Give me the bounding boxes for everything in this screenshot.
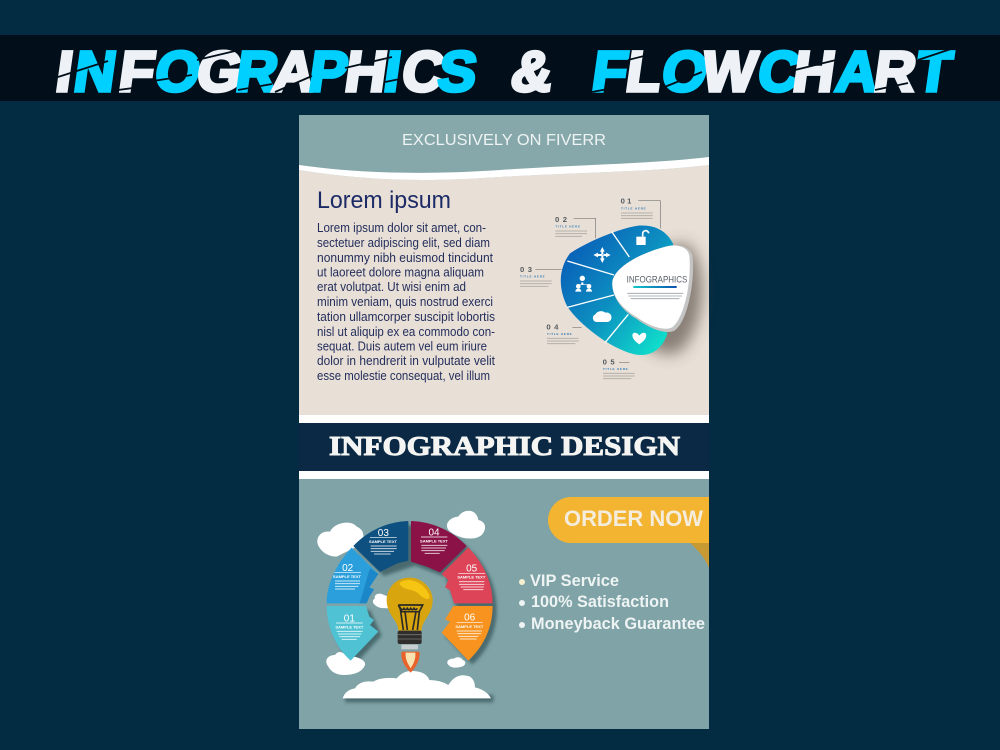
chart: infographics fan: TITLE HERE <box>547 332 572 336</box>
text block: tation ullamcorper suscipit lobortis <box>317 310 495 324</box>
title text: G <box>193 40 246 104</box>
icons <box>575 231 649 344</box>
chart: lightbulb ring: 06 <box>464 613 476 624</box>
chart: infographics fan: INFOGRAPHICS <box>627 274 687 284</box>
text block: erat volutpat. Ut wisi enim ad <box>317 280 466 294</box>
segment 05 <box>442 547 493 603</box>
list: benefits <box>519 572 705 633</box>
segment 01 <box>327 606 378 661</box>
chart: lightbulb ring: SAMPLE TEXT <box>333 574 362 579</box>
labels <box>520 197 632 366</box>
title text: A <box>269 40 319 104</box>
panel: beige content <box>299 165 709 415</box>
title text: F <box>115 40 159 104</box>
segment 04 <box>411 521 467 572</box>
chart: lightbulb ring: SAMPLE TEXT <box>335 624 364 629</box>
segment 03 <box>353 521 408 572</box>
chart: lightbulb ring: 01 <box>344 613 355 624</box>
icon: rocket flame <box>401 652 420 673</box>
blob <box>612 245 693 332</box>
labels: 02 <box>555 215 567 224</box>
chart: lightbulb ring: 03 <box>378 528 389 539</box>
wave <box>299 157 709 180</box>
list: benefits: VIP Service <box>530 572 619 590</box>
chart: lightbulb ring: 05 <box>466 564 478 575</box>
title text: A <box>832 40 882 104</box>
chart: infographics fan: TITLE HERE <box>621 207 646 211</box>
title text: O <box>151 40 204 104</box>
title text: T <box>912 40 956 104</box>
clouds <box>317 511 491 698</box>
band: infographic design: INFOGRAPHIC DESIGN <box>329 431 681 461</box>
text block: Lorem ipsum dolor sit amet, con- <box>317 221 486 235</box>
title text: L <box>622 40 666 104</box>
chart: lightbulb ring: SAMPLE TEXT <box>420 538 449 543</box>
title banner <box>0 35 1000 104</box>
chart: lightbulb ring: 04 <box>428 527 440 538</box>
chart: infographics fan: TITLE HERE <box>603 367 628 371</box>
title text: I <box>52 40 77 104</box>
shadows <box>331 525 497 702</box>
heading: exclusively: EXCLUSIVELY ON FIVERR <box>402 132 606 149</box>
labels: 03 <box>520 265 532 274</box>
text block: nisl ut aliquip ex ea commodo con- <box>317 325 495 339</box>
title text: R <box>232 40 282 104</box>
text block: sequat. Duis autem vel eum iriure <box>317 340 487 354</box>
chart: infographics fan: TITLE HERE <box>555 225 580 229</box>
text block: sectetuer adipiscing elit, sed diam <box>317 236 490 250</box>
heading: lorem ipsum: Lorem ipsum <box>317 187 451 214</box>
chart: lightbulb ring: 02 <box>342 563 354 574</box>
chart: lightbulb ring <box>317 511 497 702</box>
title text: W <box>698 40 761 104</box>
labels: 01 <box>621 197 632 206</box>
title text: I <box>380 40 405 104</box>
title text: O <box>658 40 711 104</box>
labels: 05 <box>603 357 615 366</box>
text block: ut laoreet dolore magna aliquam <box>317 266 484 280</box>
title text: & <box>507 40 557 104</box>
title text: N <box>70 40 120 104</box>
title text: H <box>341 40 391 104</box>
list: benefits: Moneyback Guarantee <box>531 615 705 633</box>
order now button: ORDER NOW <box>564 506 703 531</box>
poster <box>299 115 709 729</box>
chart: infographics fan: TITLE HERE <box>520 275 545 279</box>
title text: H <box>789 40 839 104</box>
text block: esse molestie consequat, vel illum <box>317 369 490 383</box>
title text <box>52 40 956 104</box>
chart: infographics fan <box>520 197 702 379</box>
title text: C <box>754 40 804 104</box>
title text: P <box>305 40 352 104</box>
segment 02 <box>327 548 378 603</box>
segment 06 <box>442 606 493 661</box>
icon: lightbulb <box>387 578 433 649</box>
text block: minim veniam, quis nostrud exerci <box>317 295 493 309</box>
text block: dolor in hendrerit in vulputate velit <box>317 354 495 368</box>
chart: lightbulb ring: SAMPLE TEXT <box>455 624 484 629</box>
labels: 04 <box>546 322 559 331</box>
title text: C <box>398 40 448 104</box>
band: infographic design <box>299 415 709 479</box>
title text: S <box>434 40 481 104</box>
text block: nonummy nibh euismod tincidunt <box>317 251 493 265</box>
title text: R <box>870 40 920 104</box>
panel: lower teal <box>299 479 709 729</box>
text block <box>317 221 495 383</box>
order now button <box>548 497 709 568</box>
list: benefits: 100% Satisfaction <box>531 593 669 611</box>
title text: F <box>588 40 632 104</box>
chart: lightbulb ring: SAMPLE TEXT <box>457 575 486 580</box>
chart: lightbulb ring: SAMPLE TEXT <box>369 539 398 544</box>
